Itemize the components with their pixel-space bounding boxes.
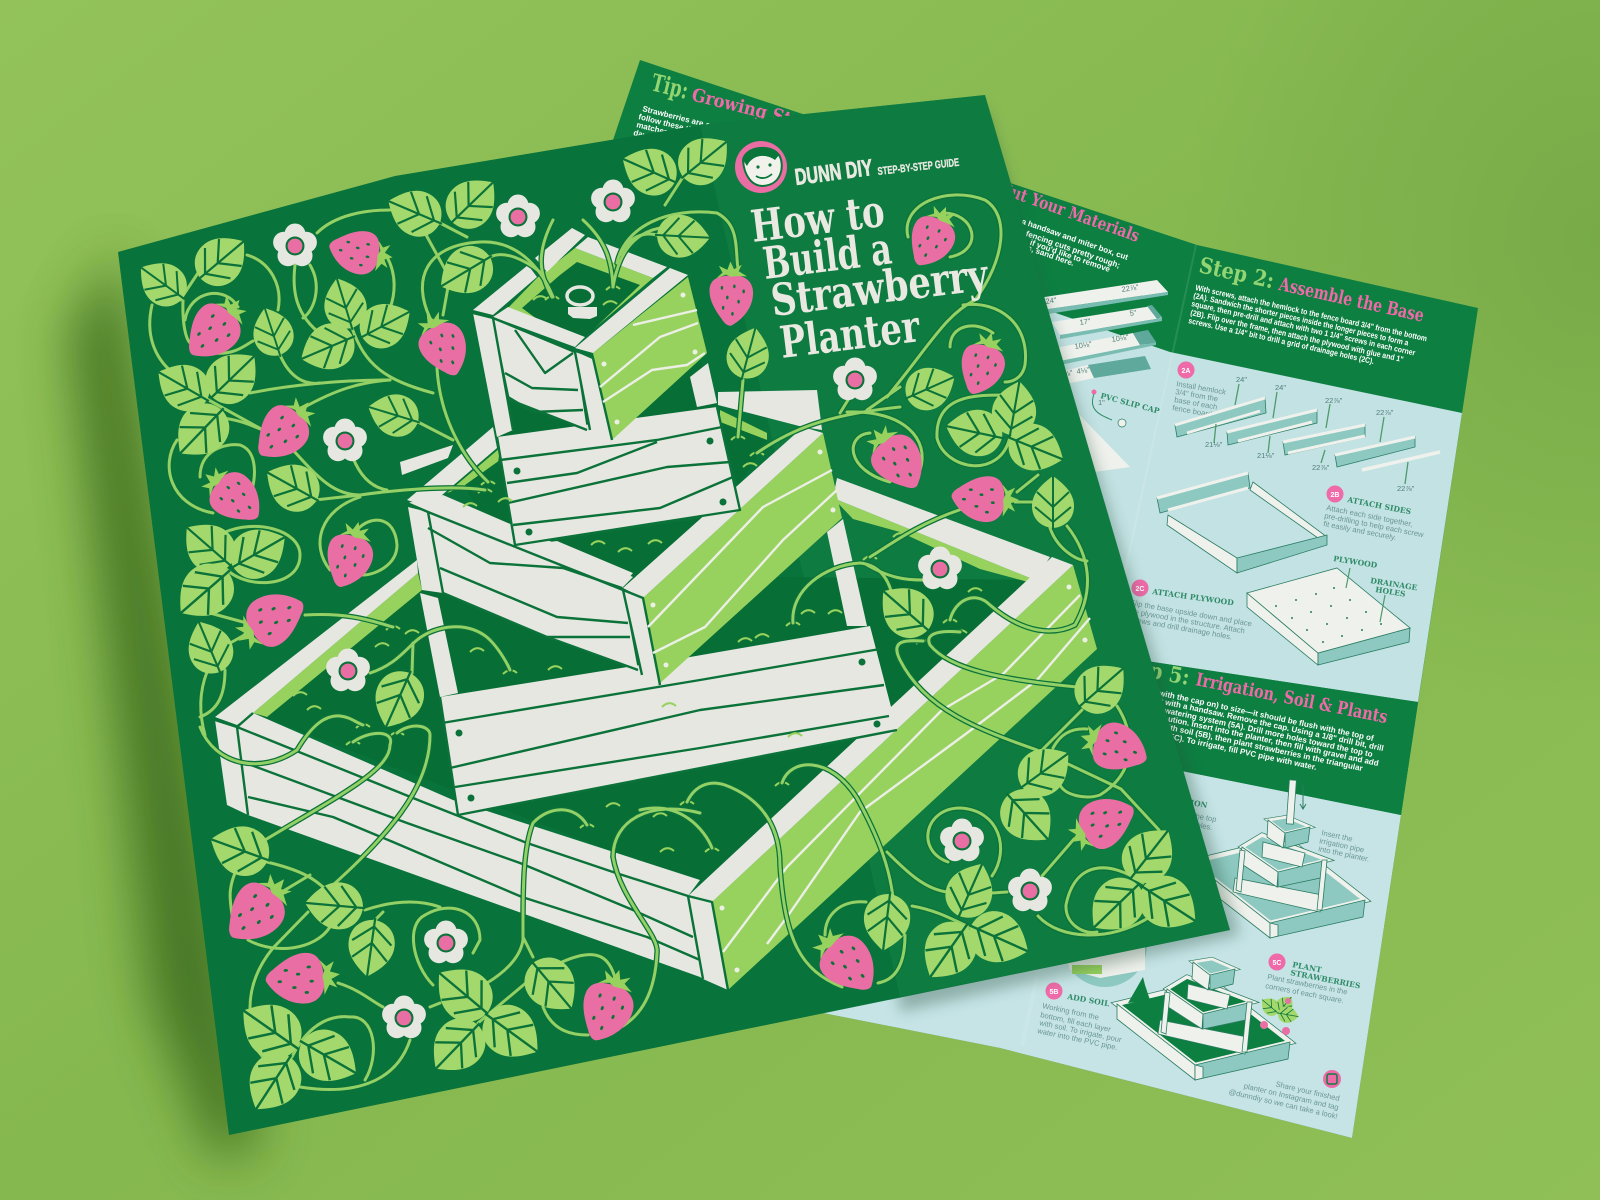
step 2 heading: Assemble the Base	[1276, 274, 1426, 327]
plywood and drainage labels: PLYWOOD	[1333, 554, 1378, 570]
step 5 body text: each tier with soil (5B), then plant strawberries in the triangular	[1127, 714, 1363, 773]
step 5 body text: corner (5C). To irrigate, fill PVC pipe with water.	[1140, 726, 1317, 772]
logo badge: Dunn DIY mascot	[735, 141, 787, 193]
top tier	[473, 228, 707, 440]
step 5 body text: Cut the PVC pipe (with the cap on) to size—it should be flush with the top of	[1090, 674, 1375, 743]
middle tier	[400, 360, 842, 685]
diagram 5C: planter with soil and plants	[1117, 959, 1300, 1080]
title: Planter	[777, 301, 923, 369]
callout 5C: corners of each square.	[1265, 981, 1345, 1005]
cut list boards: 5"	[1129, 308, 1137, 318]
cut list boards: 10⅛"	[1074, 339, 1093, 351]
callout 2B: 2B	[1331, 492, 1339, 499]
step 2 body text: screws. Use a 1/4" bit to drill a grid of drainage holes (2C).	[1188, 316, 1375, 366]
callout 5B	[1036, 982, 1123, 1052]
instagram call to action	[1228, 1070, 1341, 1121]
step 1 body text: Cedar fencing cuts pretty rough;	[1001, 221, 1121, 270]
cut list boards	[1038, 280, 1168, 385]
callout 5C	[1265, 954, 1362, 1005]
callout 2B: ATTACH SIDES	[1346, 495, 1412, 516]
callout 2A: 2A	[1182, 368, 1190, 375]
plywood sheet	[1067, 402, 1130, 473]
title	[748, 186, 992, 369]
cut list boards: 17"	[1079, 316, 1092, 327]
title: How to	[748, 186, 887, 253]
illustration: flowers	[273, 180, 1052, 1038]
PVC pipe cap	[567, 287, 597, 319]
illustration: vines	[150, 177, 1159, 1090]
callout 2A: fence board	[1172, 403, 1213, 419]
tip body text: day-neutral types	[633, 128, 700, 153]
callout 5B: Working from the	[1042, 1001, 1100, 1022]
step 1 body text: Next, cut the 2x4's. With a handsaw and miter box, cut	[932, 186, 1130, 262]
front poster shadow on back sheet	[850, 105, 1240, 1012]
cut list boards: 10⅛"	[1111, 332, 1130, 344]
cut list boards: 4⅛"	[1059, 368, 1074, 379]
step 5 heading	[1112, 651, 1389, 728]
diagram 2A: rails with dimensions: 22⅞"	[1325, 396, 1343, 405]
diagram 2A: rails with dimensions: 21⅛"	[1205, 440, 1223, 449]
step 1 body text: however, if you'd like to remove	[994, 226, 1112, 274]
callout 5A: IRRIGATION	[1153, 792, 1208, 810]
callout 2A: 3/4" from the	[1175, 387, 1219, 403]
step 2 body text: With screws, attach the hemlock to the fence board 3/4" from the bottom	[1195, 283, 1428, 343]
callout 2B	[1323, 486, 1425, 542]
callout 2A: Install hemlock	[1176, 379, 1227, 397]
callout 2B: fit easily and securely.	[1323, 519, 1397, 542]
callout 5B: bottom, fill each layer	[1040, 1010, 1112, 1034]
callout 5A: holes.	[1192, 820, 1213, 832]
callout 2B: Attach each side together,	[1326, 503, 1414, 529]
callout 5B: with soil. To irrigate, pour	[1038, 1018, 1123, 1044]
callout 5B: 5B	[1050, 989, 1058, 996]
callout 2C: ATTACH PLYWOOD	[1151, 587, 1235, 607]
step 5 body text: holes for the watering system (5A). Drill more holes toward the top to	[1115, 696, 1374, 759]
plywood and drainage labels: DRAINAGE	[1370, 576, 1418, 592]
callout 5A	[1153, 792, 1370, 864]
diagram 2A: rails with dimensions: 24"	[1275, 383, 1286, 392]
callout 5A: Insert the	[1321, 828, 1353, 844]
tip body text: matches the climate and	[636, 120, 728, 151]
callout 5A: the top	[1193, 811, 1217, 824]
poster cast shadow	[70, 252, 260, 1160]
step 5 heading: Irrigation, Soil & Plants	[1194, 669, 1389, 728]
callout 5B: water into the PVC pipe.	[1036, 1026, 1119, 1052]
plywood and drainage labels	[1333, 554, 1418, 622]
callout 2C	[1127, 580, 1253, 641]
tip heading: Growing Strawberries	[690, 85, 889, 153]
callout 5A: into the planter.	[1318, 844, 1370, 864]
soil tufts	[293, 286, 982, 852]
tip body text: follow these tips: pick a variety that	[638, 112, 771, 154]
step 5 body text: the planter, then cut with a handsaw. Remove the cap. Using a 1/8" drill bit, drill	[1088, 682, 1384, 753]
illustration: leaves	[129, 124, 1209, 1123]
callout 2C: Flip the base upside down and place	[1130, 598, 1253, 628]
callout 5A: irrigation pipe	[1319, 836, 1365, 854]
callout 2C: the plywood in the structure. Attach	[1128, 606, 1246, 635]
back sheet paper	[613, 60, 1478, 1138]
panel: light blue diagram areas	[823, 245, 1462, 1138]
callout 5C: PLANT	[1292, 960, 1323, 975]
diagram 2A: rails with dimensions: 22⅞"	[1376, 408, 1394, 417]
diagram 2C: plywood base with drainage holes	[1247, 568, 1410, 665]
step 2 heading	[1197, 252, 1427, 328]
illustration: tiered strawberry planter	[215, 228, 1097, 990]
diagram 2B: assembled frame	[1157, 473, 1327, 573]
diagram 2A: rails with dimensions: 24"	[1236, 375, 1247, 384]
panel: front poster sheet	[118, 95, 1230, 1135]
instagram call to action: Share your finished	[1275, 1079, 1341, 1103]
title: Strawberry	[768, 250, 992, 327]
illustration: strawberries	[174, 198, 1155, 1049]
diagram 5A: irrigation planter	[1192, 780, 1365, 938]
poster lighter fold panel	[700, 95, 1230, 997]
cut list boards: 22⅞"	[1121, 282, 1140, 294]
diagram 2A: rails with dimensions: 22⅞"	[1397, 484, 1415, 493]
callout 2A	[1172, 362, 1227, 419]
cut list boards: 24"	[1045, 295, 1058, 306]
cut list boards: 4⅛"	[1076, 365, 1091, 376]
diagram 2A: rails with dimensions: 21⅛"	[1257, 451, 1275, 460]
PVC slip cap label	[1092, 390, 1161, 427]
bottom tier	[215, 478, 1097, 990]
step 5 heading: Step 5:	[1112, 651, 1192, 691]
callout 2C: screws and drill drainage holes.	[1127, 614, 1233, 641]
callout 5B: ADD SOIL	[1066, 992, 1111, 1008]
inset circle: soil bag	[1063, 903, 1147, 987]
tip body text: Strawberries are easy to grow if you	[642, 104, 777, 146]
step 1 heading: Cut Your Materials	[998, 179, 1142, 247]
callout 2A: base of each	[1174, 395, 1218, 412]
tip heading	[649, 68, 890, 154]
diagram 2A: rails with dimensions	[1175, 375, 1440, 493]
tip heading: Tip:	[649, 68, 691, 105]
step 1 body text: rough edges, sand here.	[985, 229, 1075, 268]
PVC slip cap label: 1"	[1098, 398, 1105, 407]
callout 5C: Plant strawberries in the	[1267, 972, 1348, 997]
step 2 body text: (2B). Flip over the frame, then attach the plywood with glue and 1"	[1190, 308, 1405, 364]
callout 2B: pre-drilling to help each screw	[1324, 511, 1425, 539]
step 5 header band	[1100, 660, 1418, 815]
PVC slip cap label: PVC SLIP CAP	[1099, 391, 1161, 416]
instagram call to action: @dunndiy so we can take a look!	[1228, 1087, 1339, 1121]
step 2 body text: square, then pre-drill and attach with two 1 1/4" screws in each corner	[1191, 299, 1416, 358]
step 2 heading: Step 2:	[1197, 252, 1277, 294]
callout 2C: 2C	[1136, 586, 1144, 593]
panel: back sheet with instructions	[613, 60, 1478, 1138]
step 2 body text: (2A). Sandwich the shorter pieces inside the longer pieces to form a	[1193, 291, 1410, 348]
diagram 2A: rails with dimensions: 22⅞"	[1312, 463, 1330, 472]
instagram call to action: planter on Instagram and tag	[1243, 1081, 1340, 1112]
plywood and drainage labels: HOLES	[1375, 585, 1407, 599]
guide label: STEP-BY-STEP GUIDE	[877, 157, 960, 178]
title: Build a	[760, 224, 894, 290]
step 5 body text: ensure distribution. Insert into the planter, then fill with gravel and add	[1115, 703, 1380, 768]
callout 5C: STRAWBERRIES	[1290, 968, 1362, 991]
brand name: DUNN DIY	[793, 154, 874, 190]
callout 5C: 5C	[1273, 960, 1281, 967]
